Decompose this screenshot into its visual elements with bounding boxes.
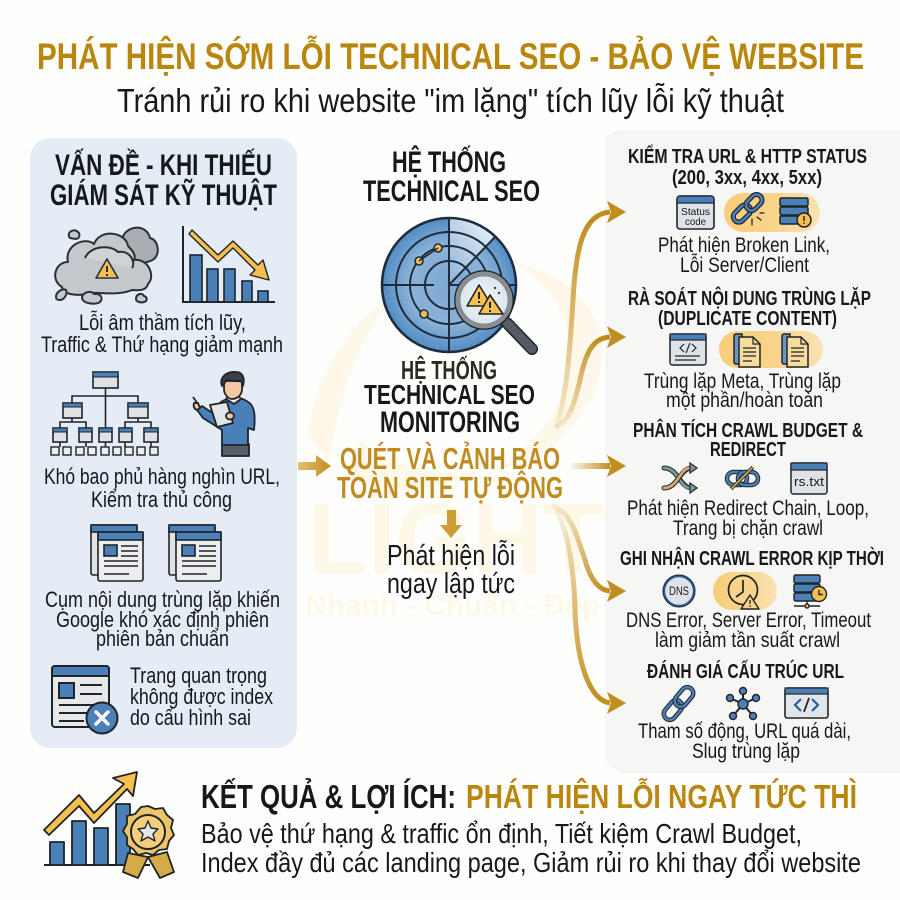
text: detect immediately [387,539,515,600]
icon: DNS badge [663,575,695,607]
text: hard to cover URLs: Khó bao phủ hàng nghìn URL, [44,464,280,489]
icon: storm clouds [55,228,158,304]
heading: REDIRECT [710,439,786,461]
heading: technical SEO system: TECHNICAL SEO [363,175,540,208]
icon: status code window [677,196,714,229]
text [644,370,841,412]
text [638,720,851,763]
icon: duplicate pages right [169,525,221,581]
panel: URL structure [638,659,851,763]
text: duplicate clusters: Cụm nội dung trùng lặp khiến [45,587,280,612]
panel: crawl budget [627,418,869,540]
icon: person with clipboard [193,372,255,456]
text: một phần/hoàn toàn [666,389,823,412]
text: Phát hiện Broken Link, [658,234,830,257]
icon: code window [670,334,706,365]
text: duplicate clusters: phiên bản chuẩn [96,626,229,651]
arrow: to crawl errors [552,506,626,602]
text: làm giảm tần suất crawl [655,629,840,652]
text: detect immediately: Phát hiện lỗi [387,539,515,572]
watermark logo [305,262,603,622]
icon: broken chain [727,467,758,489]
panel: URL and HTTP status [628,145,867,277]
text: duplicate clusters [45,587,280,651]
icon: code window [785,688,828,718]
text: silent errors [41,310,283,357]
panel heading: VẤN ĐỀ - KHI THIẾU [55,148,272,182]
heading: technical SEO system: HỆ THỐNG [392,145,506,179]
arrow: to URL check [556,201,626,428]
arrow: problems to scan [298,455,331,477]
subtitle: Tránh rủi ro khi website "im lặng" tích lũy lỗi kỹ thuật [117,82,784,119]
results text: Bảo vệ thứ hạng & traffic ổn định, Tiết kiệm Crawl Budget, [201,818,802,849]
heading: scan and alert: TOÀN SITE TỰ ĐỘNG [337,469,563,505]
icon: duplicate pages left [91,525,143,581]
icon: site tree [51,372,158,455]
text: silent errors: Lỗi âm thầm tích lũy, [79,310,246,335]
text: silent errors: Traffic & Thứ hạng giảm mạnh [41,332,283,357]
watermark logo: LIGHT [308,483,603,595]
text: Slug trùng lặp [692,740,800,763]
icon: falling bar chart [183,226,275,302]
text: pages not indexed: không được index [130,684,273,709]
results heading: KẾT QUẢ & LỢI ÍCH: [201,778,456,815]
panel: crawl errors [620,546,884,652]
heading: (200, 3xx, 4xx, 5xx) [672,167,822,189]
panel: problems [30,138,297,748]
heading [633,418,863,461]
icon: highlight pill with broken link and server [724,192,820,232]
results text [201,818,861,878]
arrow: to duplicate check [555,326,626,428]
icon: growth chart with medal [44,772,174,878]
text [626,609,871,652]
text: pages not indexed [130,663,273,730]
heading: scan and alert: QUÉT VÀ CẢNH BÁO [340,441,560,476]
heading: monitoring: TECHNICAL SEO [364,379,535,410]
text: Lỗi Server/Client [680,254,809,277]
panel heading [50,148,277,212]
heading [628,286,871,330]
text: hard to cover URLs: Kiểm tra thủ công [91,487,232,512]
icon: chain [661,685,696,722]
icon: status code window: code [685,216,706,228]
heading: monitoring: MONITORING [380,406,520,439]
watermark logo: Nhanh - Chuẩn - Đẹp [305,590,600,622]
heading: ĐÁNH GIÁ CẤU TRÚC URL [647,659,844,683]
heading [628,145,867,189]
heading: (DUPLICATE CONTENT) [658,308,837,330]
panel heading: GIÁM SÁT KỸ THUẬT [50,178,277,212]
icon: server with clock [794,575,826,608]
heading: monitoring [364,355,535,439]
text [658,234,830,277]
icon: highlight pill with clock [713,572,777,610]
icon: shuffle [664,463,697,493]
panel: duplicate content [628,286,871,412]
icon: robots.txt window [791,463,827,494]
text: pages not indexed: do cấu hình sai [130,705,251,730]
text [627,497,869,540]
panel: checks background [605,130,900,773]
text: detect immediately: ngay lập tức [387,568,515,600]
heading: scan and alert [337,441,563,505]
arrow: to URL structure [556,510,626,714]
text: Tham số động, URL quá dài, [638,720,851,743]
icon: page with error [52,666,118,734]
icon: radar with magnifier [382,218,532,352]
icon: network [726,688,760,720]
icon: status code window: Status [681,206,710,218]
icon: highlight pill with documents [719,331,823,368]
text: Trùng lặp Meta, Trùng lặp [644,370,841,393]
text: Trang bị chặn crawl [673,517,823,540]
icon: robots.txt window: rs.txt [794,475,825,489]
text: duplicate clusters: Google khó xác định phiên [56,607,269,632]
results heading [201,778,857,815]
text: hard to cover URLs [44,464,280,512]
heading: monitoring: HỆ THỐNG [401,355,497,385]
icon: DNS badge: DNS [669,586,689,598]
arrow: down [440,510,462,538]
arrow: to crawl budget [570,455,626,477]
text: pages not indexed: Trang quan trọng [130,663,267,688]
heading: technical SEO system [363,145,540,208]
